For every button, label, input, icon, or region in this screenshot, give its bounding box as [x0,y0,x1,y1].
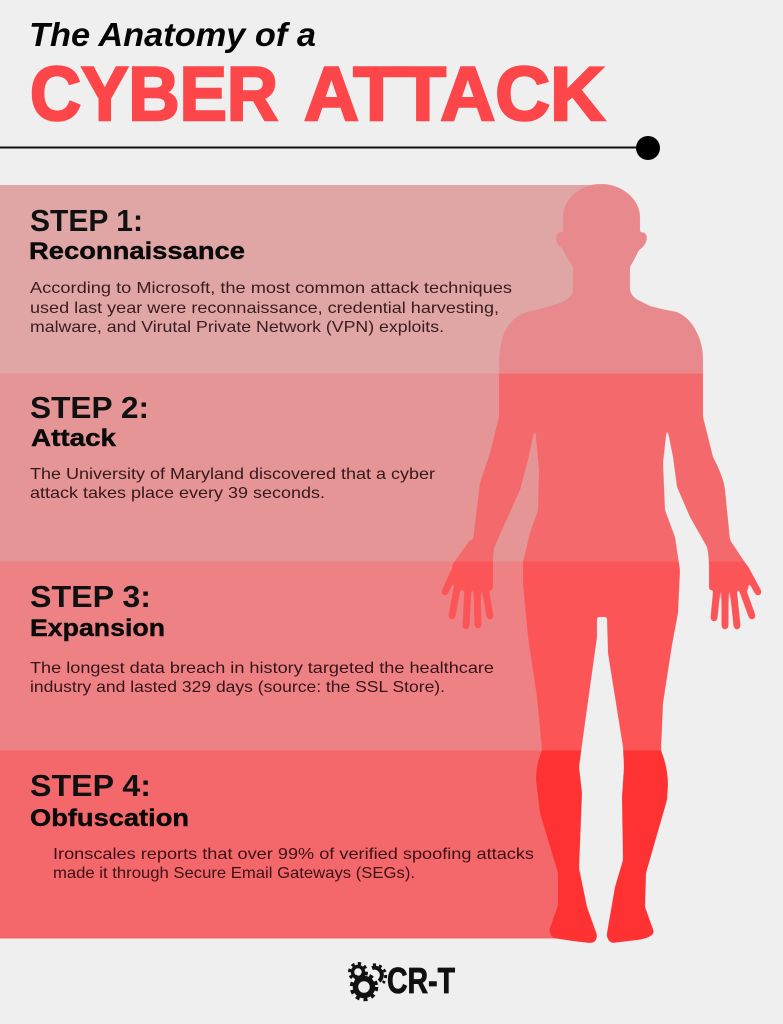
step 1 label: STEP 1: [30,203,143,238]
step 1 body: malware, and Virutal Private Network (VPN) exploits. [30,319,444,336]
step 1 text [29,203,512,336]
step 3 body: industry and lasted 329 days (source: the SSL Store). [30,679,445,696]
step 3 label: STEP 3: [30,579,151,614]
step 2 body: The University of Maryland discovered that a cyber [30,466,436,483]
step 3 body [30,660,494,696]
title: The Anatomy of a: The Anatomy of a [29,16,316,53]
step 1 body [30,280,512,336]
human body silhouette [442,184,762,943]
title: CYBER ATTACK [30,52,605,137]
step 4 text [30,768,534,882]
step 4 body: Ironscales reports that over 99% of verified spoofing attacks [53,846,534,863]
panel: step 1 band [0,185,600,374]
step 2 text [30,390,436,502]
step 2 heading: Attack [31,425,117,452]
step 4 body [53,846,534,882]
panel: step 4 band [0,750,565,938]
step 1 heading: Reconnaissance [29,238,245,265]
panel: step 3 band [0,562,560,750]
step 3 text [30,579,494,696]
panel: step 2 band [0,374,600,562]
step 2 label: STEP 2: [30,390,149,425]
step 4 body: made it through Secure Email Gateways (SEGs). [53,865,415,882]
step 1 body: According to Microsoft, the most common attack techniques [30,280,512,297]
step 2 body [30,466,436,502]
step 3 heading: Expansion [30,615,165,642]
step 2 body: attack takes place every 39 seconds. [30,485,325,502]
logo: CR-T [350,960,455,1001]
logo wordmark: CR-T [387,960,455,1001]
title: CYBER ATTACK: CYBER [30,52,278,137]
icon: gears [350,964,386,1000]
step 4 label: STEP 4: [30,768,151,803]
step 3 body: The longest data breach in history targeted the healthcare [30,660,494,677]
step 4 heading: Obfuscation [30,805,189,832]
timeline rule with dot [0,136,660,160]
title: CYBER ATTACK: ATTACK [304,52,605,137]
step 1 body: used last year were reconnaissance, credential harvesting, [30,300,499,317]
